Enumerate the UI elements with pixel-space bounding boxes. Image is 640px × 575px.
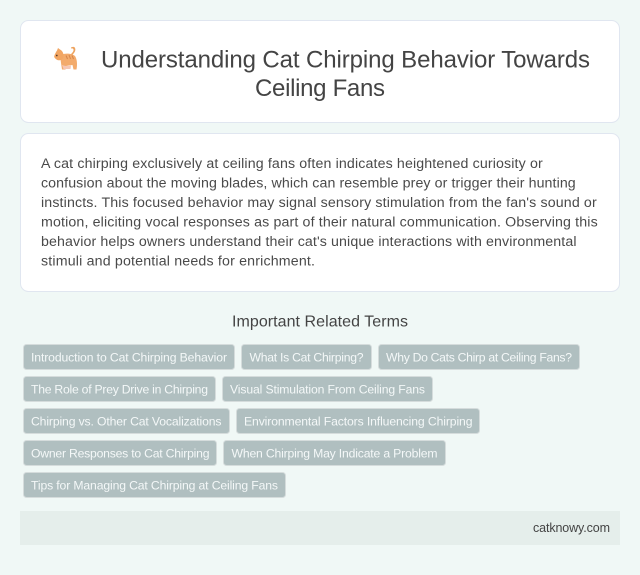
tag: What Is Cat Chirping? xyxy=(250,350,364,364)
text block: description paragraph: behavior helps owners understand their cat's unique interactions with environmental xyxy=(41,234,576,250)
tag xyxy=(24,408,230,434)
tag xyxy=(224,440,446,466)
tag: The Role of Prey Drive in Chirping xyxy=(31,382,208,396)
tag xyxy=(24,376,216,402)
tag: Why Do Cats Chirp at Ceiling Fans? xyxy=(386,350,572,364)
heading: important related terms: Important Related Terms xyxy=(232,314,408,330)
tag: When Chirping May Indicate a Problem xyxy=(232,446,438,460)
text block: description paragraph: A cat chirping exclusively at ceiling fans often indicates heightened curiosity or xyxy=(41,156,543,172)
icon: orange cat xyxy=(54,47,77,70)
tag xyxy=(378,344,580,370)
tag: Owner Responses to Cat Chirping xyxy=(31,446,210,460)
heading: Understanding Cat Chirping Behavior Towards xyxy=(101,46,590,74)
tag xyxy=(24,472,286,498)
tag: Introduction to Cat Chirping Behavior xyxy=(31,350,227,364)
tag xyxy=(236,408,480,434)
tag xyxy=(24,344,234,370)
footer bar xyxy=(20,511,620,545)
tag list xyxy=(24,344,580,498)
tag xyxy=(242,344,372,370)
footer source text: catknowy.com xyxy=(533,521,610,535)
tag: Chirping vs. Other Cat Vocalizations xyxy=(31,414,222,428)
heading xyxy=(101,46,590,102)
text block: description paragraph: motion, eliciting vocal responses as part of their natural communication. Observing this xyxy=(41,214,598,230)
text block: description paragraph: stimuli and potential needs for enrichment. xyxy=(41,254,315,270)
text block: description paragraph: confusion about the moving blades, which can resemble prey or trigger their hunting xyxy=(41,176,576,192)
tag xyxy=(24,440,216,466)
text block: description paragraph: instincts. This focused behavior may signal sensory stimulation from the fan's sound or xyxy=(41,195,597,211)
text block: description paragraph xyxy=(41,156,598,270)
tag: Tips for Managing Cat Chirping at Ceiling Fans xyxy=(31,478,278,492)
tag: Environmental Factors Influencing Chirping xyxy=(244,414,472,428)
heading: Ceiling Fans xyxy=(255,75,385,102)
panel: title card xyxy=(20,20,620,122)
tag xyxy=(222,376,432,402)
panel: description xyxy=(20,134,620,292)
tag: Visual Stimulation From Ceiling Fans xyxy=(230,382,425,396)
